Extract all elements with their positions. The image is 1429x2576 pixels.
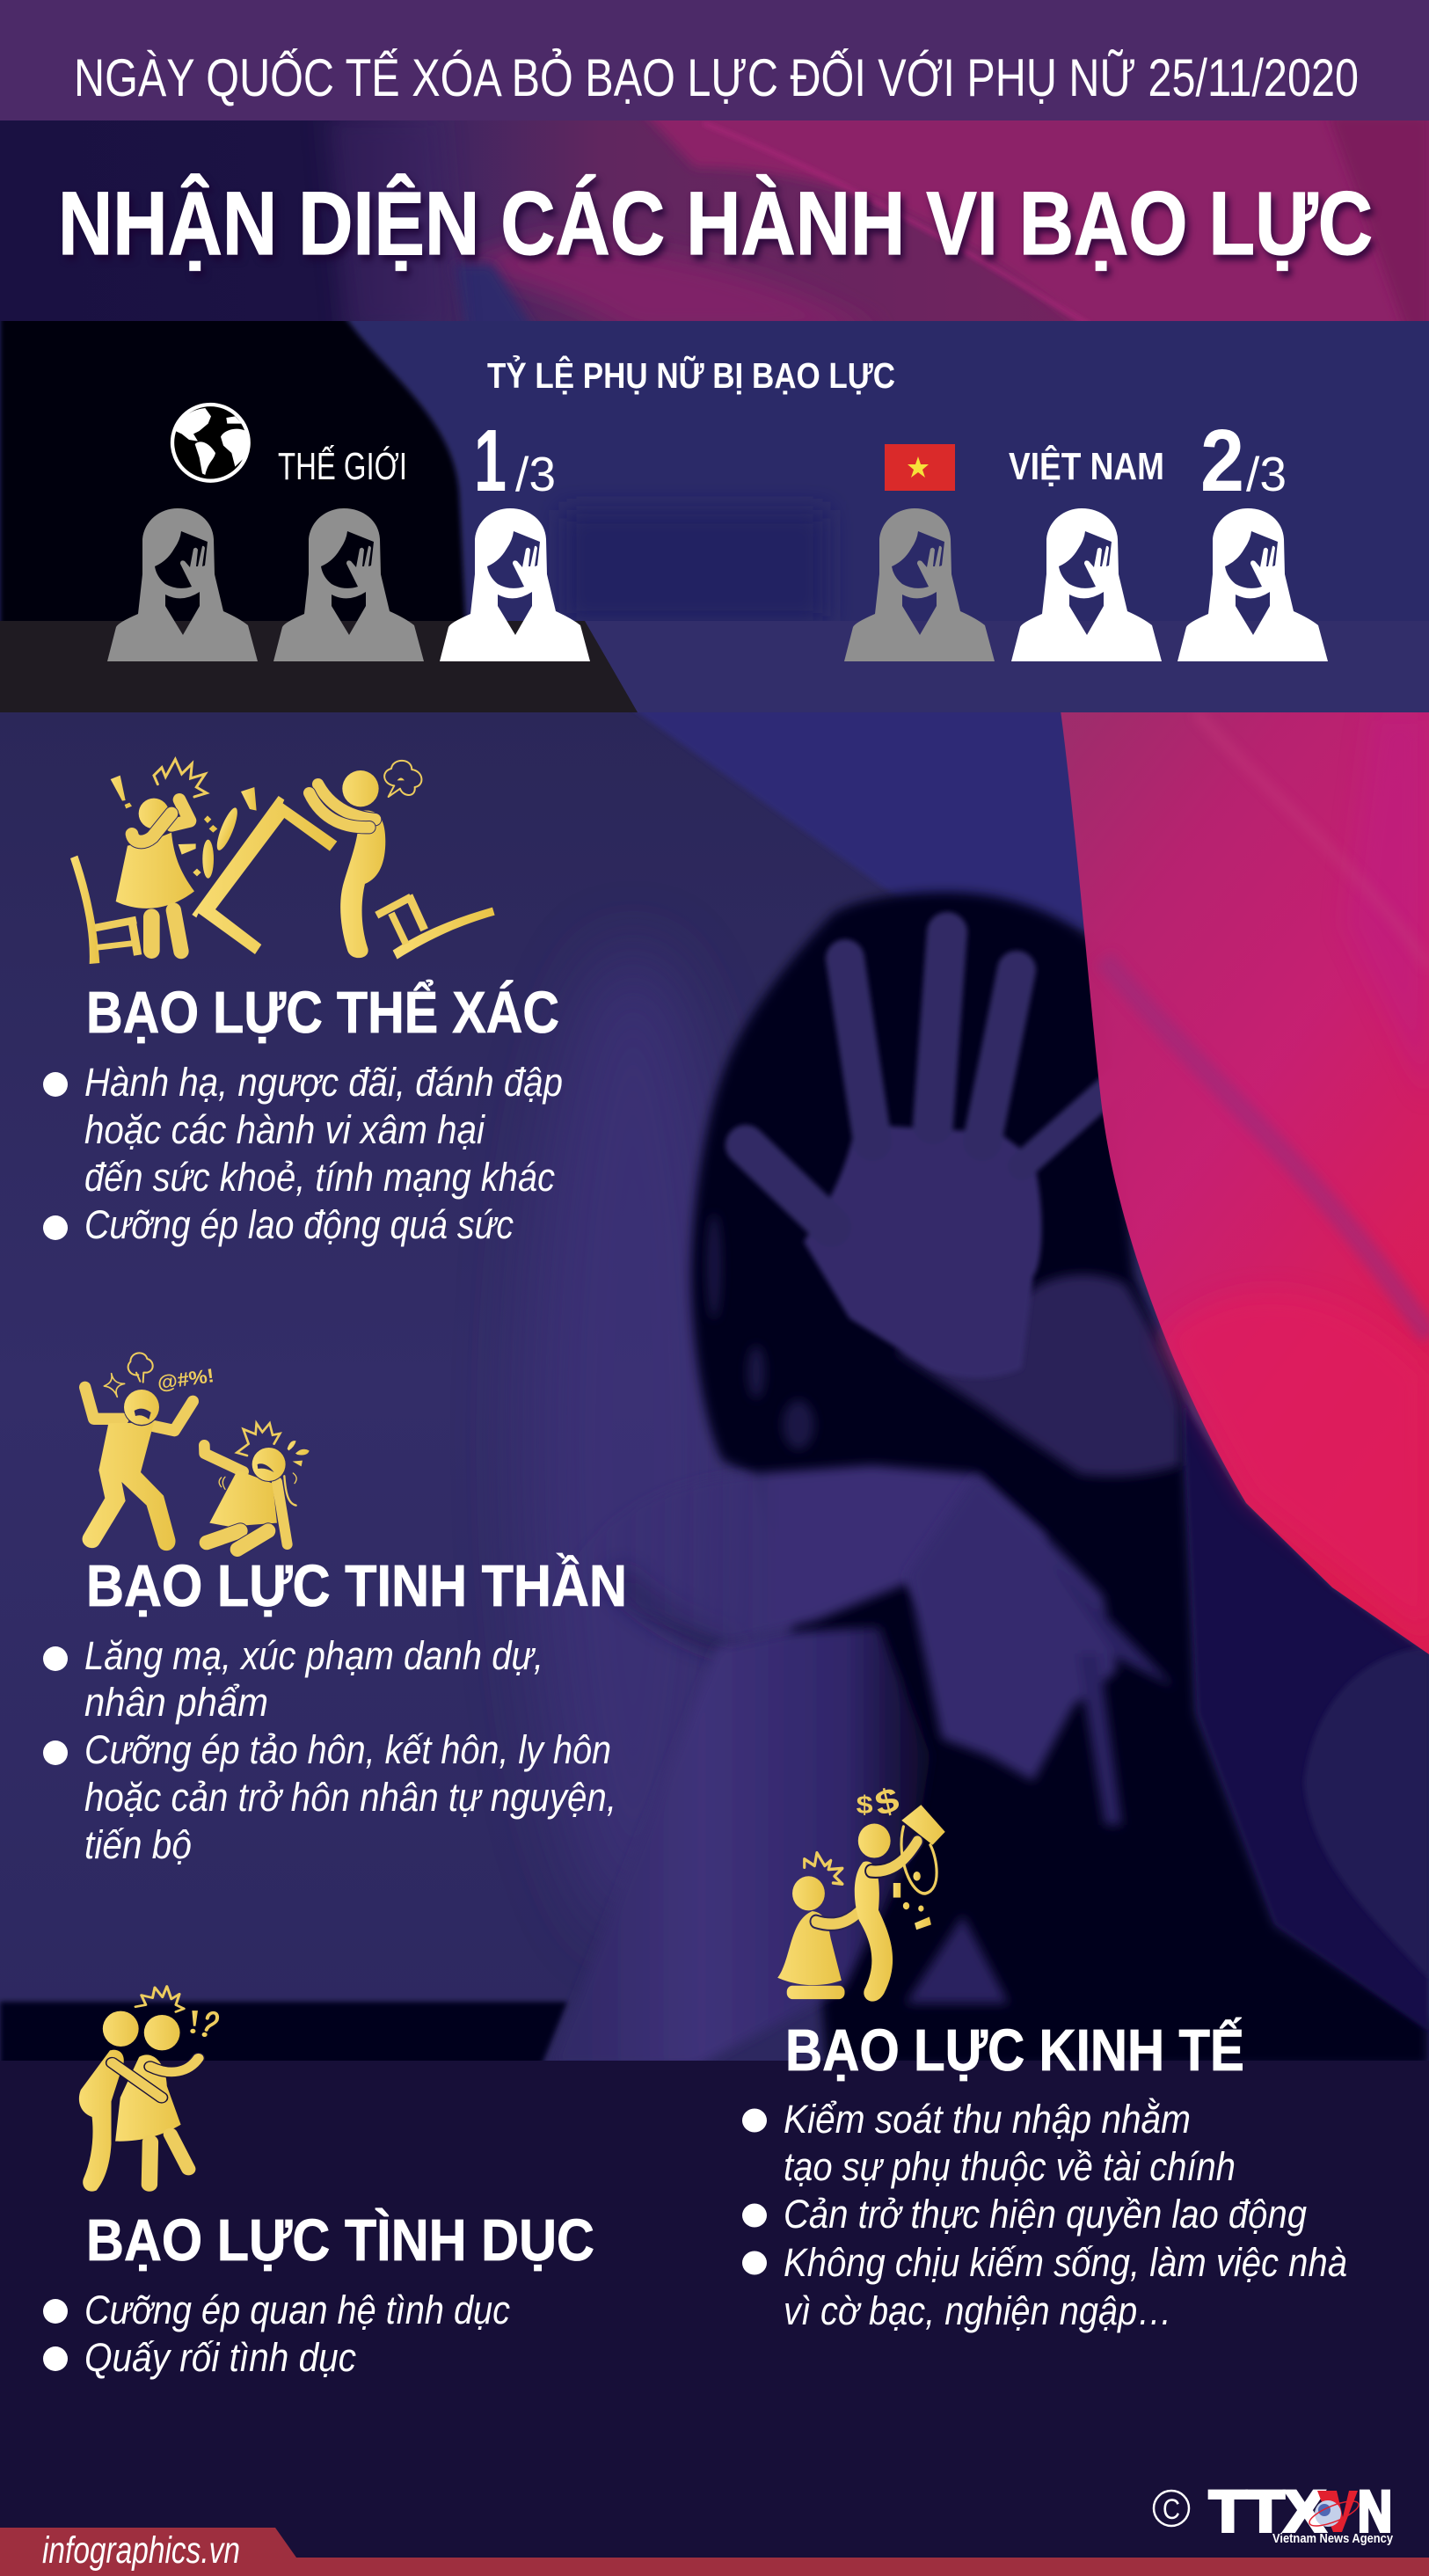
list: psychological violence: Lăng mạ, xúc phạm danh dự, xyxy=(84,1633,543,1678)
list: physical violence xyxy=(43,1060,563,1247)
panel: photo background, woman raising hand xyxy=(0,704,1429,2067)
label: Vietnam: VIỆT NAM xyxy=(1009,444,1164,488)
lower leg xyxy=(550,1627,930,2067)
raised forearm xyxy=(896,1274,1180,1476)
panel: title band background xyxy=(0,120,1429,321)
left chair xyxy=(70,856,138,964)
list: sexual violence: Quấy rối tình dục xyxy=(84,2335,356,2380)
icon: man grabbing woman xyxy=(79,1986,217,2192)
logo: TTXVN Vietnam News Agency: TTX xyxy=(1209,2478,1325,2543)
logo: TTXVN Vietnam News Agency: Vietnam News Agency xyxy=(1272,2531,1394,2546)
panel: economic violence xyxy=(742,1780,1347,2333)
pink veil xyxy=(1060,704,1429,1654)
list: economic violence: Không chịu kiếm sống, làm việc nhà xyxy=(784,2240,1347,2285)
stat: world xyxy=(107,405,590,661)
number: 1/3: /3 xyxy=(515,447,556,501)
list: physical violence: Hành hạ, ngược đãi, đánh đập xyxy=(84,1060,563,1105)
heading: economic violence: BẠO LỰC KINH TẾ xyxy=(785,2018,1244,2083)
overturned table xyxy=(192,796,337,954)
icons: three women, two highlighted xyxy=(844,508,1328,661)
hair and body silhouette xyxy=(691,892,1429,2067)
list: psychological violence: nhân phẩm xyxy=(84,1680,268,1725)
list: economic violence: Kiểm soát thu nhập nhằm xyxy=(784,2097,1191,2142)
list: economic violence: vì cờ bạc, nghiện ngập… xyxy=(784,2288,1172,2333)
panel: sexual violence xyxy=(43,1986,594,2380)
woman figure xyxy=(116,799,194,952)
text: website: infographics.vn xyxy=(42,2529,240,2572)
list: economic violence xyxy=(742,2097,1347,2333)
list: physical violence: hoặc các hành vi xâm hại xyxy=(84,1107,486,1152)
icon: shouting man and crying woman xyxy=(83,1353,310,1551)
shouting man: @#%! xyxy=(156,1364,215,1394)
list: psychological violence: hoặc cản trở hôn nhân tự nguyện, xyxy=(84,1775,616,1820)
list: physical violence: Cưỡng ép lao động quá sức xyxy=(84,1202,514,1247)
crying woman xyxy=(204,1423,310,1550)
icon: man taking money bag: $ xyxy=(871,1780,903,1823)
icon: fight with thrown furniture xyxy=(70,759,495,964)
label: world: THẾ GIỚI xyxy=(278,444,407,488)
list: economic violence: tạo sự phụ thuộc về tài chính xyxy=(784,2144,1236,2189)
navy side and knee xyxy=(1183,1402,1429,2032)
panel: physical violence xyxy=(43,759,563,1247)
subheading: share of women experiencing violence: TỶ LỆ PHỤ NỮ BỊ BẠO LỰC xyxy=(487,355,895,396)
number: 1/3 xyxy=(474,412,556,510)
logo: TTXVN Vietnam News Agency xyxy=(1154,2478,1394,2546)
right chair xyxy=(376,895,495,960)
list: sexual violence: Cưỡng ép quan hệ tình dục xyxy=(84,2288,510,2332)
icon: man taking money bag xyxy=(777,1780,945,2002)
panel: statistics band background xyxy=(0,308,1429,712)
man figure xyxy=(310,770,385,958)
icon: man taking money bag: $ xyxy=(857,1792,873,1820)
number: 1/3: 1 xyxy=(474,412,507,510)
number: 2/3: /3 xyxy=(1246,447,1287,501)
panel: bottom dark area xyxy=(0,2061,1429,2576)
panel: top banner xyxy=(0,0,1429,120)
footer: red bar with site name xyxy=(0,2528,1429,2576)
icon: globe xyxy=(172,405,249,481)
hair strands xyxy=(707,1214,814,1449)
stat: Vietnam xyxy=(844,412,1328,661)
list: physical violence: đến sức khoẻ, tính mạng khác xyxy=(84,1155,555,1200)
list: psychological violence: Cưỡng ép tảo hôn, kết hôn, ly hôn xyxy=(84,1727,611,1772)
list: psychological violence xyxy=(43,1633,616,1867)
heading: physical violence: BẠO LỰC THỂ XÁC xyxy=(86,980,559,1046)
logo: TTXVN Vietnam News Agency: N xyxy=(1358,2478,1392,2543)
bottom dark strip xyxy=(0,2002,567,2067)
list: psychological violence: tiến bộ xyxy=(84,1822,192,1867)
crossed forearm xyxy=(637,1459,1048,1639)
list: economic violence: Cản trở thực hiện quyền lao động xyxy=(784,2192,1307,2237)
icons: three women, one highlighted xyxy=(107,508,590,661)
logo: TTXVN Vietnam News Agency: C xyxy=(1163,2493,1180,2525)
lower hand xyxy=(908,1474,1174,1825)
number: 2/3: 2 xyxy=(1200,412,1244,510)
heading: psychological violence: BẠO LỰC TINH THẦN xyxy=(86,1553,627,1619)
list: sexual violence xyxy=(43,2288,510,2380)
heading: sexual violence: BẠO LỰC TÌNH DỤC xyxy=(86,2207,594,2273)
number: 2/3 xyxy=(1200,412,1287,510)
raised hand xyxy=(746,932,1117,1378)
shouting man xyxy=(83,1353,215,1551)
panel: psychological violence xyxy=(43,1353,627,1867)
icon: Vietnam flag xyxy=(885,444,955,491)
